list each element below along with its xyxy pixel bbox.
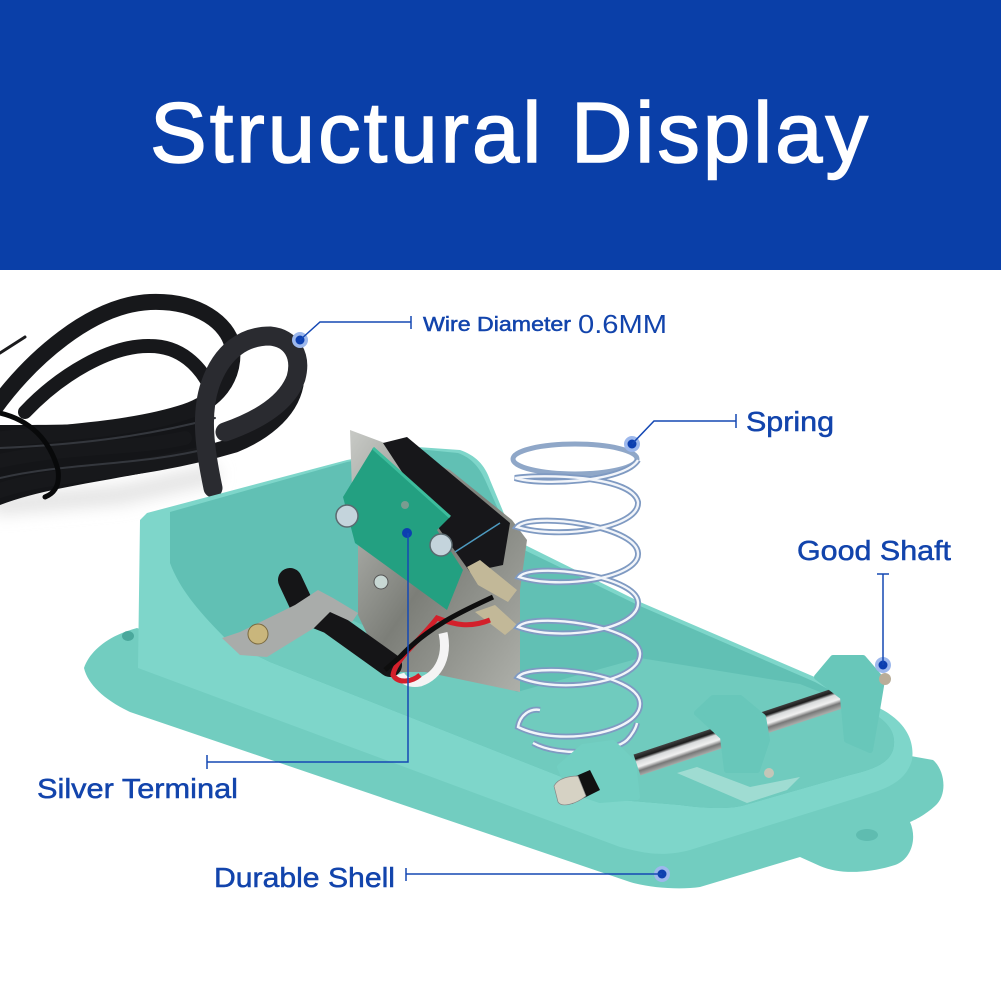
tray floor (230, 615, 894, 808)
callout: wire diameter (292, 309, 667, 348)
wires (385, 597, 493, 683)
callout: spring: Spring (746, 406, 834, 437)
callout: wire diameter: Wire Diameter (423, 313, 571, 336)
callout: silver terminal: Silver Terminal (37, 773, 238, 804)
good shaft (554, 658, 891, 805)
screws (336, 505, 358, 527)
tray interior wall (170, 449, 894, 808)
callout: good shaft: Good Shaft (797, 535, 951, 566)
spring (513, 444, 640, 752)
tray outer wall (138, 447, 913, 854)
mounting holes (122, 631, 134, 641)
callout: durable shell (214, 862, 670, 893)
floor mounting boss (677, 767, 800, 803)
terminals (467, 560, 517, 635)
ground cable (290, 580, 390, 665)
callout: wire diameter: 0.6MM (578, 309, 667, 339)
callout: durable shell: Durable Shell (214, 862, 395, 893)
base flange (84, 628, 943, 888)
header banner (0, 0, 1001, 270)
ground clip (222, 590, 358, 657)
callout: silver terminal (37, 528, 412, 804)
black cable (0, 302, 298, 505)
footswitch shell (84, 447, 943, 888)
callout: spring (624, 406, 834, 452)
green cover (343, 448, 463, 610)
callout: good shaft (797, 535, 951, 673)
metal bracket (350, 430, 527, 692)
title: Structural Display (150, 86, 868, 181)
black switch body (383, 437, 510, 572)
microswitch (222, 430, 527, 692)
